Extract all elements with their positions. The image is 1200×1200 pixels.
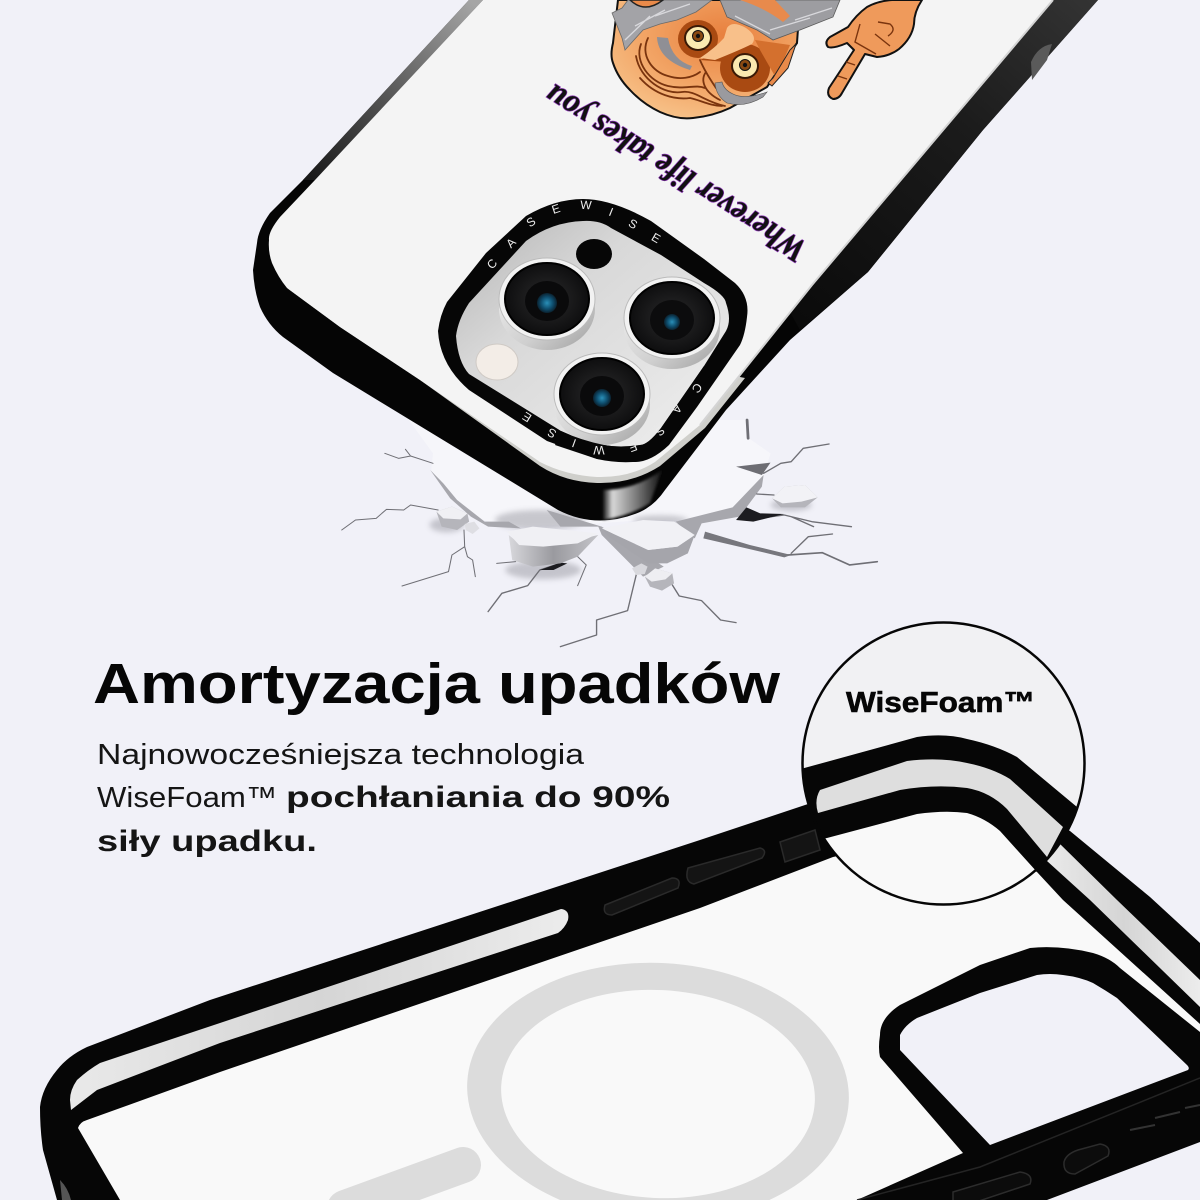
- case bumper: [253, 0, 1098, 521]
- broken chunk left: [507, 527, 598, 567]
- loupe outline: [802, 622, 1084, 904]
- top phone with black case: [253, 0, 1098, 521]
- right side wall: [790, 0, 1098, 330]
- body paragraph: [97, 739, 670, 858]
- casewise ring text upper: S: [524, 214, 538, 230]
- wrinkles: [636, 38, 725, 106]
- loupe label: WiseFoam™: [846, 687, 1035, 719]
- crater slab: [409, 420, 770, 527]
- dark fissures: [540, 463, 791, 570]
- head: [612, 0, 800, 118]
- forehead strip: [740, 0, 790, 22]
- bumper gleam: [603, 470, 662, 520]
- camera cutout: [900, 974, 1189, 1145]
- camera plate: [456, 221, 729, 446]
- loupe background: [802, 622, 1084, 904]
- casewise ring text upper: E: [550, 201, 562, 217]
- beard: [715, 82, 767, 105]
- heading: Amortyzacja upadków: [93, 652, 781, 716]
- eyes: [685, 26, 758, 78]
- bottom phone case, inside view: [40, 790, 1200, 1200]
- sideburn: [657, 37, 692, 70]
- illustration: old man's face upside down: [612, 0, 840, 118]
- body paragraph: Najnowocześniejsza technologia: [97, 739, 585, 771]
- casewise ring text upper: A: [503, 235, 519, 251]
- buttons lower edge: [953, 1144, 1109, 1200]
- side buttons: [1031, 44, 1052, 80]
- casewise ring text lower: E: [520, 409, 534, 425]
- broken chunk right: [602, 520, 695, 563]
- casewise ring text lower: W: [593, 443, 605, 457]
- body paragraph: pochłaniania do 90%: [286, 781, 670, 814]
- left side port: [60, 1180, 71, 1200]
- small rubble: [436, 485, 818, 591]
- casewise ring text lower: I: [570, 436, 578, 450]
- casewise ring text lower: A: [669, 402, 685, 416]
- edge line: [700, 0, 1053, 425]
- grey hair left: [612, 0, 712, 50]
- casewise ring text lower: E: [627, 439, 639, 455]
- casewise ring text upper: W: [580, 198, 593, 212]
- magsafe alignment bar: [345, 1165, 463, 1200]
- casewise ring text upper: E: [649, 230, 663, 246]
- slogan text: Wherever life takes you: [538, 76, 813, 269]
- crack lines: [342, 420, 877, 647]
- illustration: pointing hand: [826, 0, 922, 99]
- cheek bags: [755, 40, 790, 78]
- casewise ring text upper: S: [626, 216, 640, 232]
- lens right: [624, 277, 720, 369]
- casewise ring text lower: [520, 380, 705, 457]
- silver rim: [287, 288, 745, 483]
- nose: [700, 24, 754, 60]
- casewise ring text upper: C: [484, 256, 500, 272]
- buttons upper edge: [604, 830, 820, 915]
- white back panel: [269, 0, 1053, 477]
- casewise ring text upper: [484, 198, 663, 272]
- microphone hole: [576, 239, 612, 269]
- casewise ring text lower: S: [545, 425, 559, 441]
- casewise ring text lower: C: [689, 380, 705, 396]
- soft shadows: [430, 499, 812, 579]
- grey hair right and brow: [720, 0, 840, 40]
- ear side: [768, 44, 796, 86]
- upper left edge highlight: [303, 0, 483, 180]
- casewise ring text lower: S: [652, 423, 668, 439]
- magsafe ring: [461, 953, 855, 1200]
- casewise ring text upper: I: [607, 205, 615, 219]
- magnified case corner: [804, 735, 1076, 870]
- interior of the clear back: [78, 830, 1200, 1200]
- black frame: [40, 790, 1200, 1200]
- hair streaks: [625, 4, 832, 40]
- body paragraph: WiseFoam™: [97, 782, 277, 814]
- flash: [476, 344, 518, 380]
- lower edge highlight line: [857, 1078, 1200, 1200]
- clear window strip, right: [1047, 842, 1200, 1007]
- cracked ground impact illustration: [342, 420, 877, 647]
- ear top: [630, 0, 663, 7]
- clear window strip, left: [70, 909, 568, 1110]
- camera ring and module: [438, 198, 748, 462]
- lens left: [499, 258, 595, 350]
- finger creases: [838, 22, 893, 79]
- lower right bumper sheen: [1130, 1105, 1200, 1130]
- ring: [438, 199, 748, 462]
- eye sockets: [678, 20, 770, 92]
- callout: WiseFoam magnifier: [801, 621, 1086, 906]
- body paragraph: siły upadku.: [97, 825, 317, 858]
- crater walls: [430, 470, 764, 577]
- ring lip over lower right lens: [555, 366, 712, 462]
- lens bottom: [554, 353, 650, 445]
